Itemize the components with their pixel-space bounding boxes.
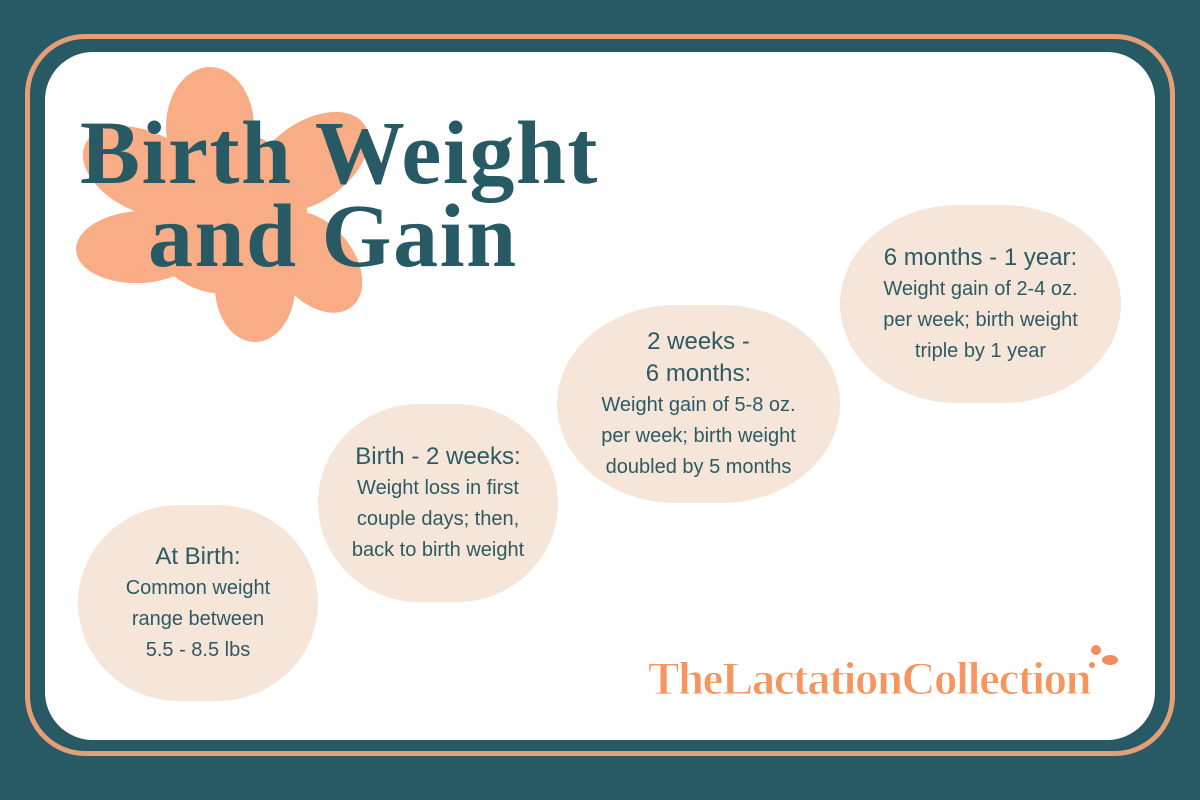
bubble: at birth: 5.5 - 8.5 lbs <box>146 638 250 660</box>
icon: flower <box>76 67 367 342</box>
bubble: birth - 2 weeks: couple days; then, <box>357 508 519 530</box>
bubble: 2 weeks - 6 months: 6 months: <box>646 360 751 386</box>
bubble: 6 months - 1 year: per week; birth weight <box>883 308 1078 330</box>
bubble: 2 weeks - 6 months: 2 weeks - <box>647 328 750 354</box>
bubble: 2 weeks - 6 months: Weight gain of 5-8 oz. <box>601 394 796 416</box>
logo: TheLactationCollection <box>648 653 1090 705</box>
title: Birth Weight <box>80 104 599 203</box>
bubble: 2 weeks - 6 months <box>557 305 840 503</box>
bubble: at birth: Common weight <box>126 576 270 598</box>
bubble: birth - 2 weeks: back to birth weight <box>352 538 524 560</box>
bubble: at birth <box>78 505 318 701</box>
bubble: 6 months - 1 year: Weight gain of 2-4 oz. <box>883 278 1078 300</box>
icon: logo droplets <box>1089 645 1118 668</box>
bubble: 6 months - 1 year <box>840 205 1121 403</box>
bubble: 2 weeks - 6 months: doubled by 5 months <box>606 456 791 478</box>
bubble: birth - 2 weeks: Birth - 2 weeks: <box>355 442 521 470</box>
white panel <box>45 52 1155 740</box>
bubble: 6 months - 1 year: triple by 1 year <box>915 340 1046 362</box>
title <box>80 104 599 286</box>
bubble: birth - 2 weeks: Weight loss in first <box>357 476 519 498</box>
title: and Gain <box>148 187 518 286</box>
bubble: at birth: range between <box>132 608 264 630</box>
bubble: at birth: At Birth: <box>155 542 241 570</box>
bubble: 2 weeks - 6 months: per week; birth weight <box>601 424 796 446</box>
bubble: 6 months - 1 year: 6 months - 1 year: <box>884 244 1077 270</box>
bubble: birth - 2 weeks <box>318 404 558 602</box>
